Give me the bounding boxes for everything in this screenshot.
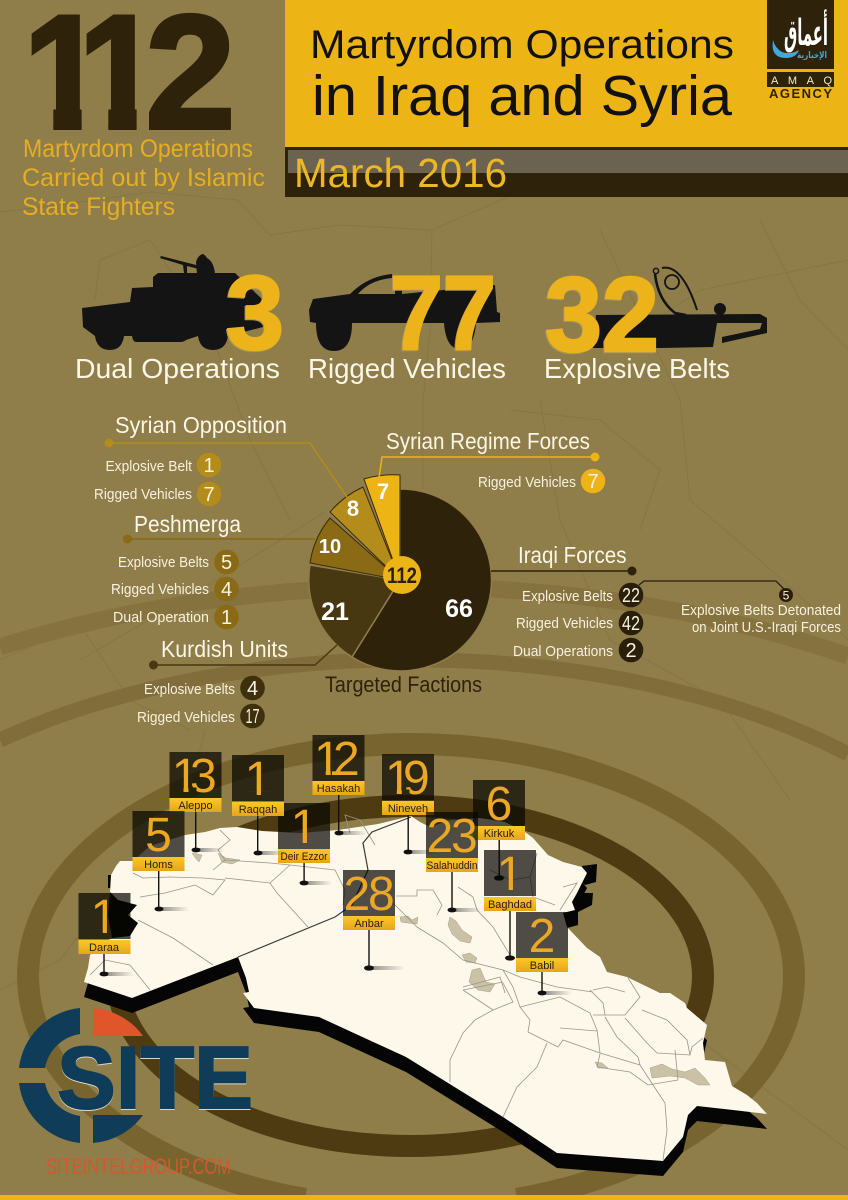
SITE Intelligence Group logo [19, 1008, 253, 1179]
number 3: 3 [225, 256, 283, 373]
title text: Martyrdom Operations [310, 23, 734, 67]
faction: Iraqi Forces [491, 542, 841, 662]
leader line [149, 645, 337, 670]
map flag: Deir Ezzor [278, 801, 332, 885]
breakdown [137, 676, 265, 728]
title text [310, 23, 734, 128]
callout: joint forces belts: 5 [783, 588, 790, 602]
map land surface [84, 816, 767, 1161]
icon: crosshair ring [19, 1008, 143, 1143]
map flag: Anbar: 28 [344, 868, 395, 921]
map flag: Daraa [78, 891, 134, 976]
label: Dual Operations [75, 353, 280, 384]
map flag: Anbar [343, 868, 405, 971]
breakdown: Dual Operations [513, 643, 613, 660]
breakdown: Explosive Belt [106, 458, 193, 475]
breakdown: Rigged Vehicles [111, 581, 209, 598]
chart caption: Targeted Factions [325, 672, 482, 697]
headline caption: State Fighters [22, 193, 175, 221]
slice: Kurdish Units 21 [309, 565, 400, 657]
headline caption: Martyrdom Operations [23, 135, 253, 163]
slice values: 21 [321, 598, 349, 626]
map flag: Deir Ezzor: 1 [291, 801, 317, 854]
breakdown: Dual Operation [113, 609, 209, 626]
map flag: Daraa: 1 [91, 891, 117, 944]
map flag: Hasakah: 12 [314, 733, 360, 786]
map flag: Homs: 5 [145, 809, 172, 862]
map flag: Homs: Homs [144, 859, 173, 871]
map flag: Baghdad: 1 [497, 848, 523, 901]
leader line [123, 534, 315, 544]
headline caption: Carried out by Islamic [22, 164, 265, 192]
map flag: Salahuddin [426, 810, 482, 912]
breakdown: Rigged Vehicles [516, 615, 613, 632]
breakdown [478, 469, 605, 493]
Amaq Agency logo [767, 0, 834, 101]
number 77: 77 [389, 256, 495, 373]
icon: armoured vehicle with gunner [82, 254, 263, 350]
faction: Peshmerga [111, 511, 315, 629]
date text: March 2016 [294, 150, 507, 196]
breakdown: 7 [203, 484, 215, 506]
lakes and marshes [192, 853, 710, 1085]
centre total [383, 556, 421, 594]
number 32: 32 [544, 257, 658, 375]
Amaq Agency logo: الإخبارية [797, 50, 827, 61]
slice: Iraqi Forces 66 [352, 489, 491, 671]
breakdown [94, 453, 221, 506]
slice values: 7 [377, 479, 389, 504]
map flag: Kirkuk [473, 778, 525, 881]
big number 112 [32, 12, 231, 130]
stat: dual operations: 3 [226, 255, 284, 372]
faction: Syrian Regime Forces [379, 428, 605, 493]
callout: joint forces belts [639, 581, 841, 636]
map flag: Homs [132, 809, 189, 911]
map of Syria and Iraq [84, 815, 767, 1176]
map flag: Babil: 2 [529, 910, 555, 963]
map flag: Nineveh: Nineveh [388, 803, 428, 815]
breakdown: 17 [246, 706, 260, 728]
breakdown [111, 550, 239, 629]
map flag: Hasakah: Hasakah [317, 783, 360, 795]
breakdown [513, 583, 643, 662]
wordmark: SITE [57, 1029, 253, 1128]
map flag: Raqqah: Raqqah [239, 804, 277, 816]
map flag: Babil [516, 910, 572, 995]
slice values: 10 [319, 536, 341, 558]
map flag: Aleppo: 13 [172, 750, 217, 803]
breakdown: 4 [247, 678, 258, 700]
leader line [491, 566, 636, 576]
map flag: Raqqah: 1 [245, 753, 271, 806]
label: Rigged Vehicles [308, 353, 506, 384]
stat: rigged vehicles: 77 [390, 255, 496, 372]
heading: Iraqi Forces [518, 542, 626, 568]
breakdown: 7 [587, 471, 599, 493]
Amaq Agency logo: AMAQ [771, 75, 832, 87]
slice values: 66 [445, 595, 473, 623]
title banner [285, 0, 848, 147]
map flag: Kirkuk: 6 [486, 778, 512, 831]
breakdown: Rigged Vehicles [137, 709, 235, 726]
icon: pickup truck [309, 274, 500, 351]
map flag: Baghdad: Baghdad [488, 899, 532, 911]
heading: Kurdish Units [161, 636, 288, 662]
map flag: Aleppo: Aleppo [178, 800, 213, 812]
breakdown: Explosive Belts [144, 681, 235, 698]
breakdown: 22 [622, 585, 640, 607]
leader line [104, 438, 347, 497]
Amaq Agency logo: AGENCY [769, 86, 832, 101]
breakdown: Rigged Vehicles [94, 486, 192, 503]
breakdown: Rigged Vehicles [478, 474, 576, 491]
stat: rigged vehicles [308, 255, 506, 384]
icon: explosive belt with grenade [593, 268, 767, 348]
map flag: Deir Ezzor: Deir Ezzor [280, 851, 328, 863]
slice values: 8 [347, 496, 359, 521]
map flag: Salahuddin: Salahuddin [426, 860, 478, 872]
left headline: total count [22, 0, 265, 221]
map flag: Aleppo [170, 750, 224, 852]
targeted factions pie chart [309, 475, 491, 697]
map flag: Hasakah [312, 733, 367, 835]
background concentric rings [0, 587, 848, 1199]
stat: explosive belts: 32 [545, 256, 659, 374]
breakdown: Explosive Belts [522, 588, 613, 605]
map flag: Salahuddin: 23 [426, 810, 478, 863]
map flag: Baghdad [484, 848, 536, 961]
map flag: Anbar: Anbar [354, 918, 384, 930]
map flag: Nineveh: 19 [385, 752, 430, 805]
slice: Syrian Regime Forces 7 [364, 475, 400, 580]
breakdown: Explosive Belts [118, 554, 209, 571]
breakdown: 2 [625, 640, 637, 662]
slice: Syrian Opposition 8 [330, 487, 400, 580]
slice values [319, 479, 473, 626]
faction: Syrian Opposition [94, 412, 347, 506]
map flag: Daraa: Daraa [89, 942, 120, 954]
centre total: 112 [387, 563, 417, 588]
breakdown: 42 [622, 613, 640, 635]
map flag: Raqqah [232, 753, 286, 855]
website: SITEINTELGROUP.COM [46, 1154, 231, 1179]
map flag: Babil: Babil [530, 960, 554, 972]
map flag: Nineveh [382, 752, 436, 854]
SITE Intelligence Group logo: SITE [57, 1028, 253, 1127]
heading: Peshmerga [134, 511, 241, 537]
stat: explosive belts [544, 256, 767, 384]
label: Explosive Belts [544, 353, 730, 384]
heading: Syrian Opposition [115, 412, 287, 438]
title text: in Iraq and Syria [312, 64, 732, 128]
date strip [285, 147, 848, 197]
province borders [90, 815, 703, 1160]
Syria-Iraq border [238, 817, 411, 957]
breakdown: 1 [221, 607, 232, 629]
breakdown: 4 [221, 579, 232, 601]
breakdown: 1 [203, 455, 215, 477]
heading: Syrian Regime Forces [386, 428, 590, 454]
faction: Kurdish Units [137, 636, 337, 728]
breakdown: 5 [221, 552, 232, 574]
slice: Peshmerga 10 [310, 518, 400, 580]
map flag: Kirkuk: Kirkuk [484, 828, 515, 840]
map extrusion wall [84, 831, 767, 1176]
headline caption [22, 135, 265, 221]
stat: dual operations [75, 254, 284, 384]
leader line [379, 452, 600, 478]
